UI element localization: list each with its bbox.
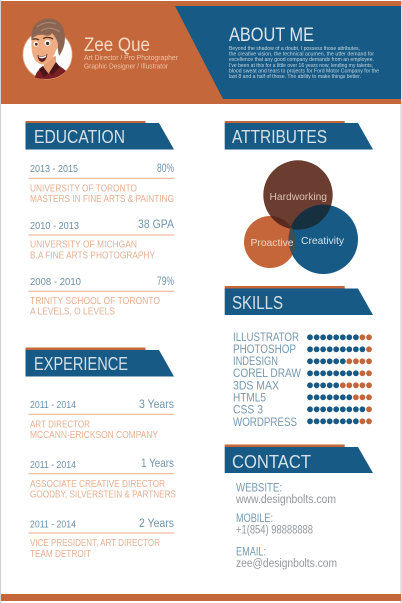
heading: education bbox=[26, 121, 174, 150]
education entry 1: MASTERS IN FINE ARTS & PAINTING bbox=[30, 193, 174, 205]
education entry 2: UNIVERSITY OF MICHGAN bbox=[30, 238, 137, 250]
skills labels: WORDPRESS bbox=[233, 415, 297, 429]
skills labels: HTML5 bbox=[233, 390, 266, 404]
education entry 1 bbox=[28, 161, 174, 205]
venn diagram: attributes: Creativity bbox=[301, 235, 345, 247]
education entry 3: 2008 - 2010 bbox=[30, 276, 81, 288]
education entry 1: 2013 - 2015 bbox=[30, 163, 78, 175]
venn diagram: attributes: Proactive bbox=[250, 237, 294, 249]
experience entry 2: 1 Years bbox=[141, 456, 174, 470]
name and role: Graphic Designer / Illustrator bbox=[84, 62, 168, 70]
experience entry 3 bbox=[28, 516, 174, 560]
education entry 1: UNIVERSITY OF TORONTO bbox=[30, 182, 137, 194]
contact details bbox=[235, 483, 337, 570]
heading: attributes bbox=[225, 121, 373, 150]
experience entry 3: 2 Years bbox=[139, 516, 174, 530]
skill rating dots bbox=[307, 334, 372, 424]
about me: I've been at this for a little over 16 years now, lending my talents, bbox=[229, 63, 373, 69]
heading: education: EDUCATION bbox=[34, 127, 125, 147]
education entry 3: A LEVELS, O LEVELS bbox=[30, 306, 115, 318]
skills labels: 3DS MAX bbox=[233, 378, 279, 392]
about me: ABOUT ME bbox=[229, 25, 314, 46]
education entry 2: 38 GPA bbox=[138, 217, 174, 231]
education entry 3: 79% bbox=[157, 274, 174, 288]
contact details: +1(854) 98888888 bbox=[236, 525, 313, 537]
experience entry 1: 3 Years bbox=[139, 397, 174, 411]
heading: experience: EXPERIENCE bbox=[34, 354, 128, 374]
experience entry 3: VICE PRESIDENT, ART DIRECTOR bbox=[30, 537, 160, 549]
experience entry 1: MCCANN-ERICKSON COMPANY bbox=[30, 429, 158, 441]
experience entry 1: 2011 - 2014 bbox=[30, 399, 76, 411]
heading: skills: SKILLS bbox=[232, 293, 283, 313]
skills labels: INDESIGN bbox=[233, 354, 278, 368]
heading: contact bbox=[225, 444, 373, 473]
skills labels: ILLUSTRATOR bbox=[233, 330, 299, 344]
experience entry 3: 2011 - 2014 bbox=[30, 518, 76, 530]
name and role bbox=[84, 35, 178, 70]
heading: experience bbox=[26, 348, 174, 376]
education entry 3 bbox=[28, 274, 174, 318]
experience entry 3: TEAM DETROIT bbox=[30, 548, 91, 560]
heading: skills bbox=[225, 286, 373, 315]
name and role: Zee Que bbox=[84, 35, 150, 56]
education entry 2: B.A FINE ARTS PHOTOGRAPHY bbox=[30, 249, 155, 261]
about me bbox=[229, 25, 379, 80]
contact details: MOBILE: bbox=[236, 513, 273, 525]
icon: avatar portrait bbox=[23, 18, 72, 79]
experience entry 2: GOODBY, SILVERSTEIN & PARTNERS bbox=[30, 488, 176, 500]
footer band bbox=[1, 594, 401, 601]
heading: attributes: ATTRIBUTES bbox=[232, 127, 327, 147]
heading: contact: CONTACT bbox=[232, 452, 311, 472]
about me: last 8 and a half of those. The ability to make things better. bbox=[229, 74, 361, 80]
contact details: zee@designbolts.com bbox=[236, 558, 337, 570]
venn diagram: attributes bbox=[244, 160, 358, 274]
contact details: WEBSITE: bbox=[236, 483, 282, 495]
venn diagram: attributes: Hardworking bbox=[270, 191, 327, 203]
experience entry 1: ART DIRECTOR bbox=[30, 418, 90, 430]
about me: the creative vision, the technical acumen, the utter demand for bbox=[229, 52, 374, 58]
header band bbox=[1, 1, 401, 104]
about me: excellence that any good company demands from an employee. bbox=[229, 57, 374, 63]
experience entry 2: 2011 - 2014 bbox=[30, 459, 76, 471]
about me: Beyond the shadow of a doubt, I possess those attributes, bbox=[229, 46, 360, 52]
experience entry 1 bbox=[28, 397, 174, 441]
education entry 2: 2010 - 2013 bbox=[30, 220, 79, 232]
name and role: Art Director / Pro Photographer bbox=[84, 53, 178, 62]
contact details: www.designbolts.com bbox=[235, 494, 336, 506]
skills labels: PHOTOSHOP bbox=[233, 342, 296, 356]
education entry 1: 80% bbox=[157, 161, 174, 175]
education entry 2 bbox=[28, 217, 174, 261]
experience entry 2: ASSOCIATE CREATIVE DIRECTOR bbox=[30, 478, 165, 490]
skills labels: COREL DRAW bbox=[233, 366, 302, 380]
experience entry 2 bbox=[28, 456, 176, 500]
about me: blood sweat and tears to projects for Ford Motor Company for the bbox=[229, 68, 379, 74]
contact details: EMAIL: bbox=[236, 547, 266, 559]
skills labels bbox=[233, 330, 302, 429]
education entry 3: TRINITY SCHOOL OF TORONTO bbox=[30, 295, 160, 307]
skills labels: CSS 3 bbox=[233, 402, 263, 416]
